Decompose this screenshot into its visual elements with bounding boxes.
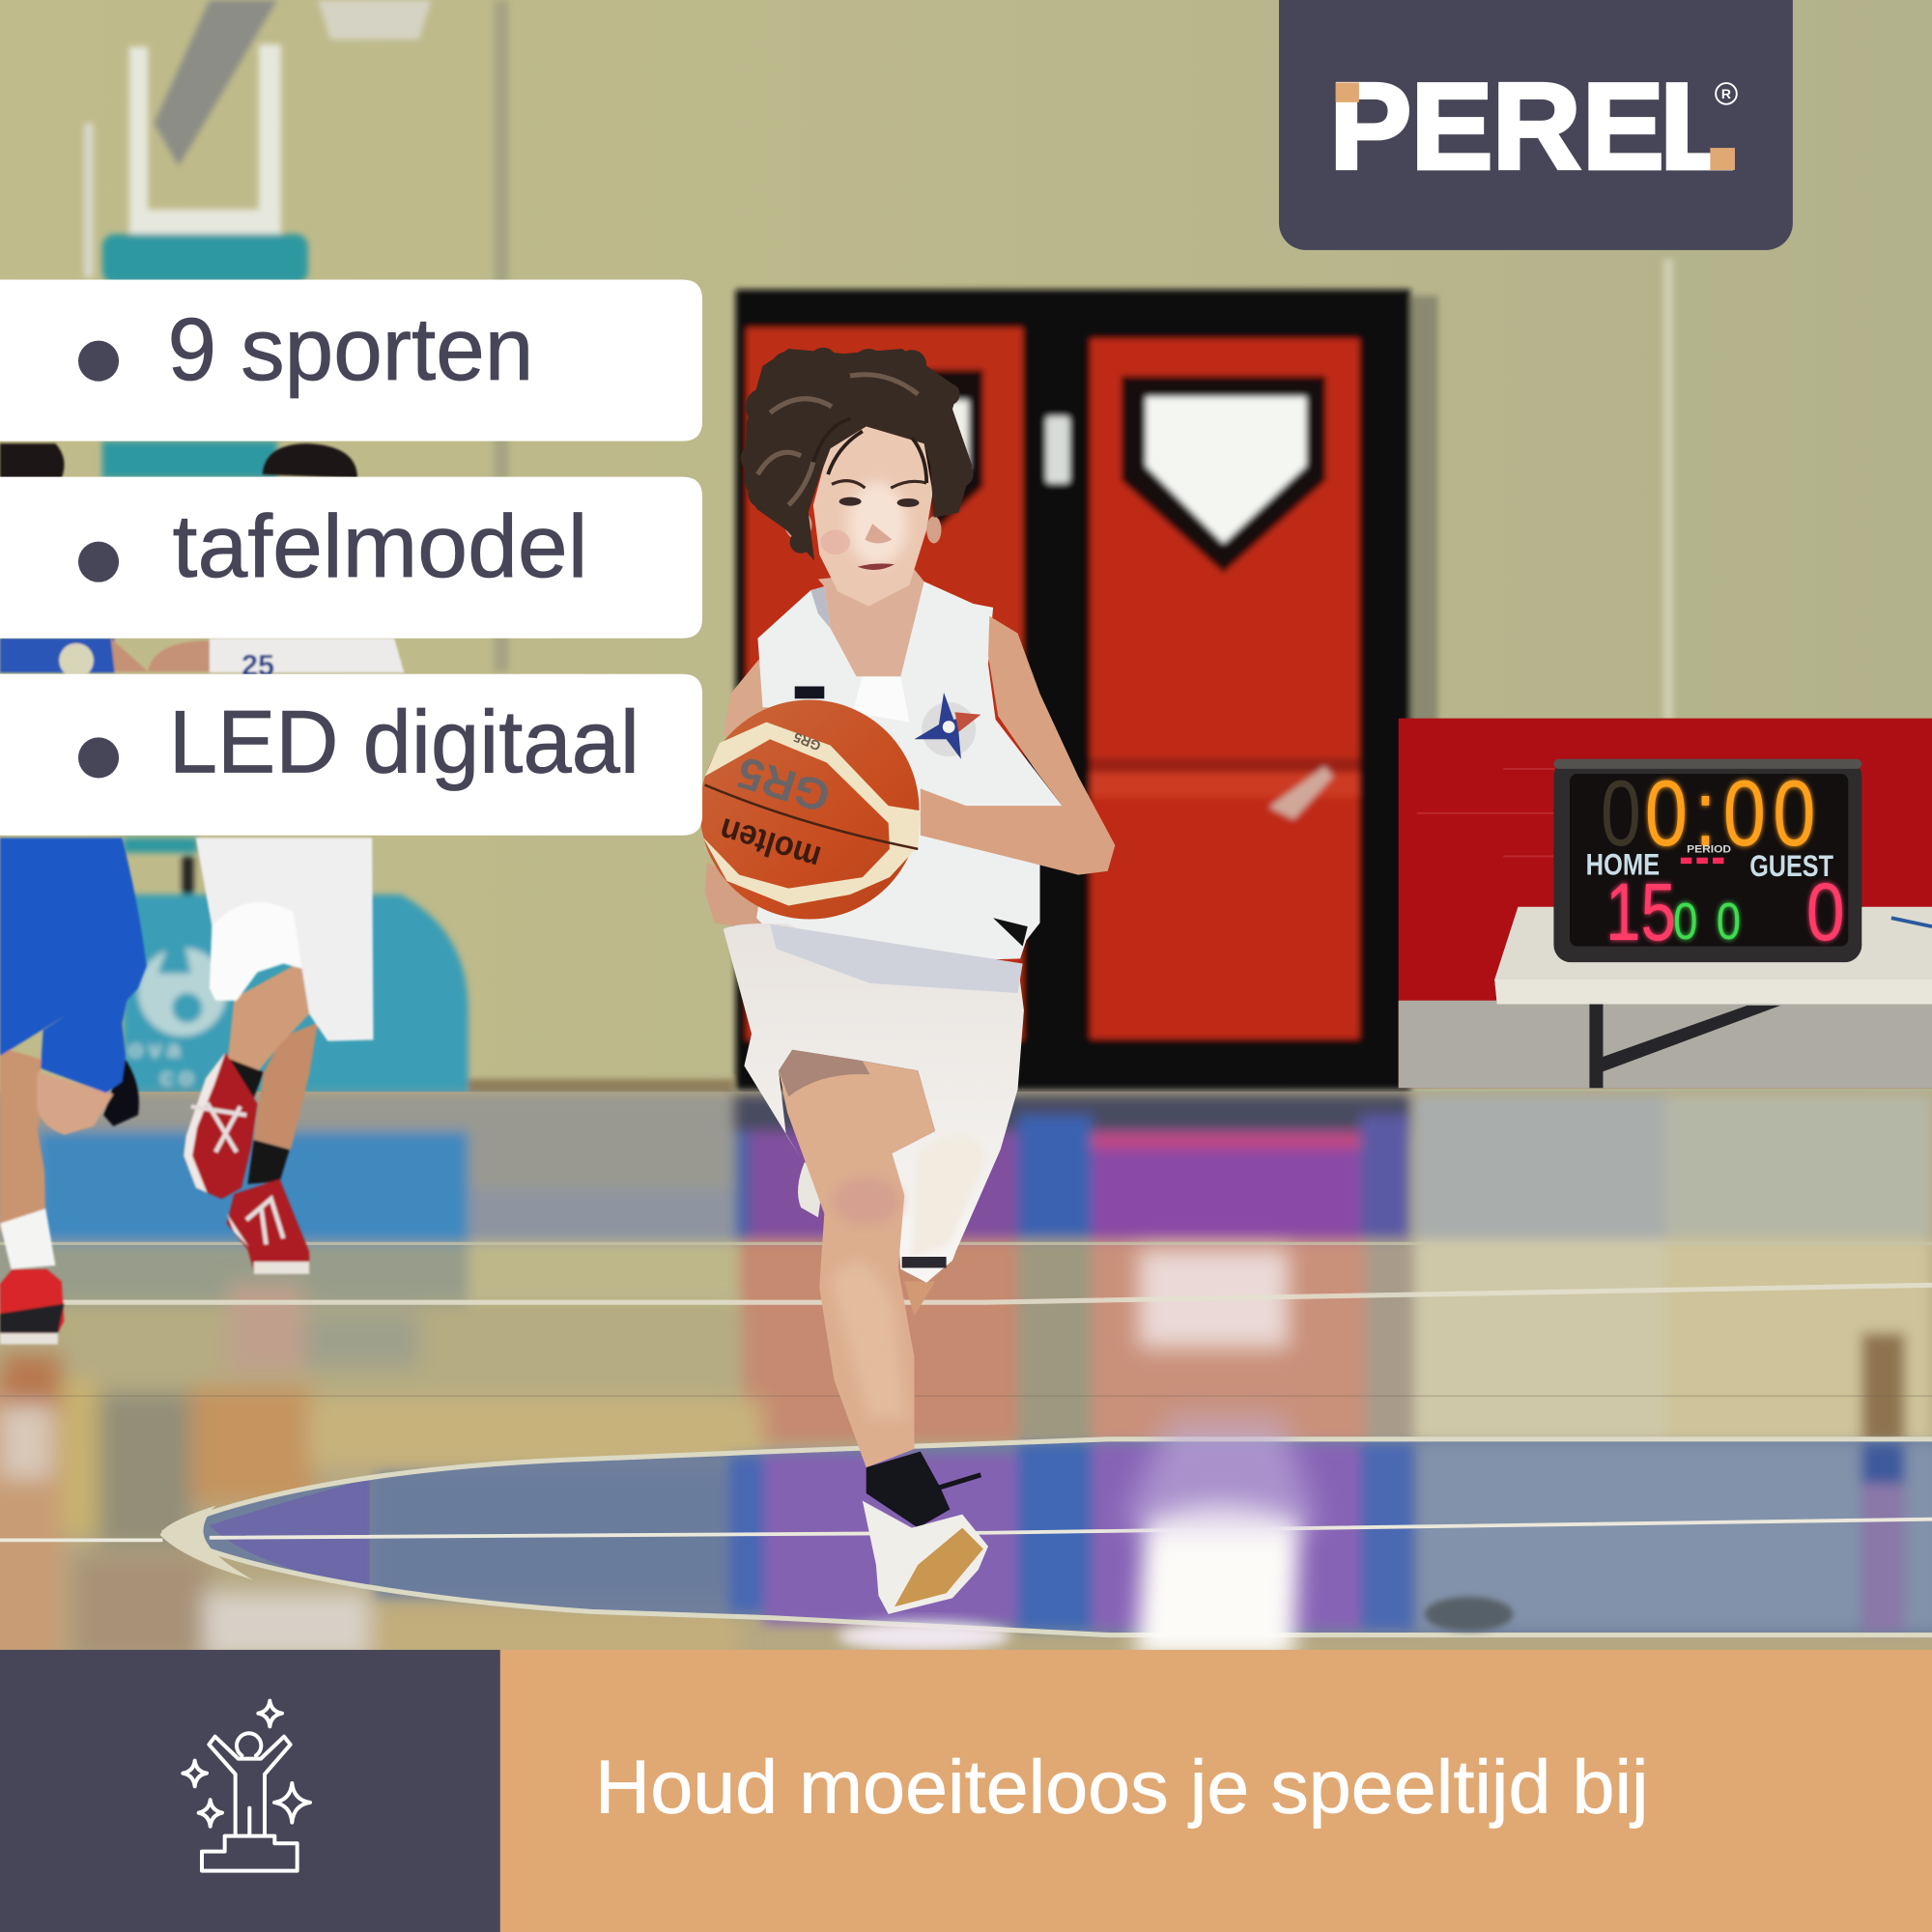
icon: winner on podium with stars <box>183 1701 310 1871</box>
unlit digit: 0 <box>1601 761 1641 866</box>
right arm <box>921 616 1115 875</box>
head and face <box>784 426 941 607</box>
background player in blue <box>0 443 148 1345</box>
basketball <box>699 699 921 920</box>
scoreboard device: GUEST <box>1749 848 1833 883</box>
neck <box>818 569 924 676</box>
scoreboard device: 0 <box>1717 892 1741 951</box>
white sock <box>0 1208 55 1269</box>
background player in white with red shoes: 25 <box>242 649 274 682</box>
center circle on the court <box>0 1439 1932 1635</box>
basketball: GR5 <box>791 729 823 754</box>
guest score: 0 <box>1806 867 1845 958</box>
rear leg below shorts <box>904 1282 935 1316</box>
main player: basketball child <box>699 348 1115 1614</box>
game clock: 0:00 <box>1645 761 1823 866</box>
folding table <box>1494 907 1932 1005</box>
red shoe <box>0 1269 64 1336</box>
door frame <box>735 290 1410 1091</box>
feature pill: tafelmodel <box>0 477 702 639</box>
blue shorts <box>0 838 147 1093</box>
logo wordmark: PEREL <box>1329 59 1735 196</box>
feature pill: 9 sporten: 9 sporten <box>167 300 533 399</box>
upper lane band <box>0 1094 739 1244</box>
jersey badge <box>914 693 980 759</box>
photo background: gym wall and doors: co <box>160 1065 199 1092</box>
logo accent squares <box>1336 82 1735 170</box>
photo background: gym wall and doors <box>0 0 1932 1128</box>
panel: icon block <box>0 1650 500 1932</box>
first sock <box>222 1059 264 1097</box>
first red shoe <box>184 1052 258 1199</box>
rear shoe <box>798 1162 823 1217</box>
fouls: 0 <box>1673 892 1697 951</box>
left arm <box>705 659 813 929</box>
team labels: HOME <box>1586 847 1660 882</box>
jersey <box>756 579 1062 963</box>
photo background: gym wall and doors: ova <box>128 1036 185 1063</box>
wall seen between players <box>124 838 197 853</box>
front thigh <box>228 961 310 1072</box>
feature pill: tafelmodel: tafelmodel <box>173 497 587 596</box>
photo background: court floor <box>0 1092 1932 1663</box>
white shorts <box>196 838 373 1041</box>
shorts <box>724 923 1024 1283</box>
court lines <box>0 1242 1932 1245</box>
left red door <box>747 327 1023 1040</box>
rear leg <box>254 1023 318 1150</box>
feature pill: 9 sporten <box>0 280 702 441</box>
panel: scoreboard photo inset <box>1399 719 1932 1088</box>
floor glare <box>1136 1501 1300 1658</box>
registered mark <box>1716 83 1737 104</box>
shoe <box>863 1452 988 1614</box>
basketball hoop support <box>84 0 431 478</box>
basketball: molten <box>715 810 825 878</box>
panel: Perel logo <box>1279 0 1793 250</box>
period lamps <box>1681 858 1723 864</box>
second sock <box>247 1140 290 1184</box>
second red shoe <box>227 1179 309 1271</box>
black shoe behind <box>103 1056 139 1126</box>
panel: tagline bar: Houd moeiteloos je speeltijd bij <box>595 1746 1649 1829</box>
registered mark: R <box>1721 86 1731 101</box>
mottled wood reflections <box>0 1249 1289 1663</box>
feature pill: LED digitaal: LED digitaal <box>169 694 639 792</box>
door handle plate <box>1046 416 1069 483</box>
curly hair <box>741 348 974 560</box>
feature pill: LED digitaal <box>0 674 702 836</box>
home score: 15 <box>1605 867 1676 957</box>
legs <box>0 1047 45 1233</box>
right red door <box>1091 339 1359 1038</box>
front leg <box>779 1050 935 1467</box>
middle wood band <box>0 1242 469 1310</box>
teal padded banner <box>124 895 469 1119</box>
background player in white with red shoes <box>148 443 404 1274</box>
shadow on the floor <box>1424 1597 1513 1632</box>
ball print: GR5 <box>731 747 836 823</box>
scoreboard device <box>1553 759 1861 962</box>
panel: tagline bar <box>500 1650 1932 1932</box>
period label: PERIOD <box>1687 844 1731 856</box>
